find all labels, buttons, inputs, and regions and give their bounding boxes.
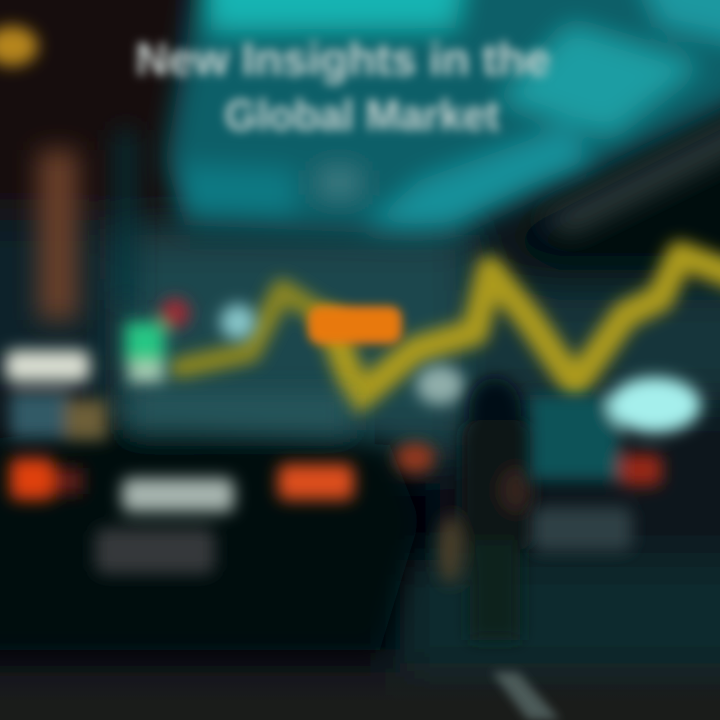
icons: coloured market markers [125,298,464,405]
line chart: yellow zigzag [180,255,720,398]
title [136,33,550,140]
panel: teal glass ceiling [165,0,720,235]
car: right vehicle and headlight [530,377,701,551]
callout: orange label [308,306,402,344]
road marking [492,672,560,720]
title: Global Market [224,91,500,140]
icon: amber lamp [0,26,38,66]
car: lights and plate [5,350,435,574]
structural beam and pillar [38,80,720,320]
car: dark body [0,395,420,650]
title: New Insights in the [136,33,550,85]
figure: standing person [438,378,534,640]
road surface [0,680,720,720]
